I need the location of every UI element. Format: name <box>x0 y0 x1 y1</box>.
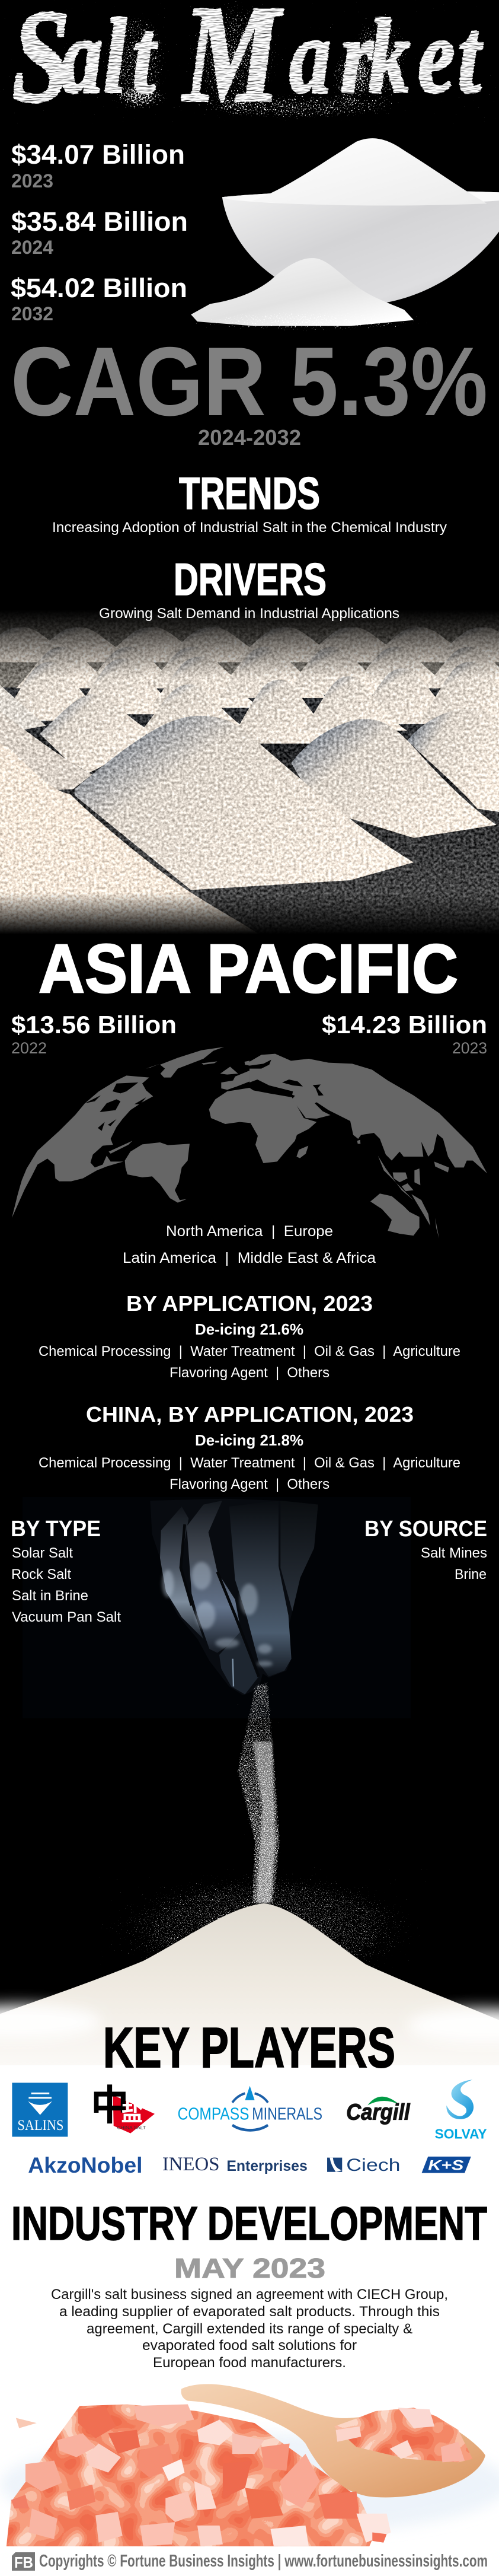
stat: Asia Pacific 2022: $13.56 Billion <box>11 1011 177 1039</box>
image: bowl of salt <box>191 138 499 326</box>
list: by type: Salt in Brine <box>12 1588 88 1604</box>
logo: Salins <box>12 2083 68 2136</box>
logo: Compass Minerals <box>178 2086 322 2130</box>
heading: Asia Pacific: ASIA PACIFIC <box>39 930 458 1007</box>
stat: 2032 <box>11 273 187 324</box>
list: by source: BY SOURCE <box>364 1517 487 1542</box>
segment list: Flavoring Agent | Others <box>169 1476 330 1492</box>
logo: Compass Minerals: COMPASS <box>178 2104 249 2123</box>
logo: K+S <box>422 2157 471 2173</box>
section: China by application <box>39 1402 460 1492</box>
title: Salt Market: t <box>132 0 158 115</box>
list: by type: Solar Salt <box>12 1545 73 1561</box>
far right foreground pile <box>407 708 499 812</box>
text: driver description: Growing Salt Demand in Industrial Applications <box>99 606 399 622</box>
title: Salt Market: r <box>341 0 374 115</box>
stat: Asia Pacific 2022 <box>11 1011 177 1057</box>
logo: Ciech <box>327 2155 401 2175</box>
highlighted crystals <box>11 2404 465 2546</box>
soft surface <box>0 2433 499 2536</box>
title: Salt Market: k <box>369 0 410 115</box>
title: Salt Market: l <box>104 0 127 115</box>
list: by type <box>11 1517 121 1625</box>
segment list: Flavoring Agent | Others <box>169 1365 330 1381</box>
far rows of salt piles <box>0 627 499 744</box>
logo: Salins: SALINS <box>18 2117 63 2134</box>
text: industry development paragraph <box>51 2287 448 2371</box>
heading: BY APPLICATION, 2023 <box>126 1291 373 1316</box>
list: other regions <box>123 1223 376 1266</box>
text: trend description: Increasing Adoption of Industrial Salt in the Chemical Industry <box>52 520 447 536</box>
photo: salt pans <box>0 610 499 946</box>
logo: China Salt: 中 <box>91 2084 129 2129</box>
right foreground pile <box>291 719 497 838</box>
spoon <box>181 2384 485 2497</box>
stat: Asia Pacific 2023: 2023 <box>452 1039 487 1057</box>
list: by type: BY TYPE <box>11 1517 101 1542</box>
logo: China Salt <box>91 2084 155 2134</box>
logo: Compass Minerals: MINERALS <box>252 2104 322 2123</box>
pile of pink salt <box>7 2404 376 2547</box>
text: industry development paragraph: agreement, Cargill extended its range of specialty & <box>87 2321 412 2337</box>
logos: key players <box>12 2080 487 2177</box>
logo: AkzoNobel: AkzoNobel <box>28 2153 143 2177</box>
glove <box>150 1499 318 1695</box>
market size stats <box>11 139 188 324</box>
ground <box>0 737 499 939</box>
small pile of salt <box>191 258 414 326</box>
segment list <box>39 1455 460 1492</box>
bowl <box>222 190 499 305</box>
text: industry development paragraph: a leading supplier of evaporated salt products. Through this <box>59 2304 440 2320</box>
salt crystals in spoon <box>334 2408 472 2462</box>
list: by source: Brine <box>455 1566 487 1582</box>
central big pile <box>75 716 414 890</box>
stat: 2023: 2023 <box>11 170 53 192</box>
CAGR period: 2024-2032 <box>198 425 301 450</box>
title: Salt Market: t <box>458 0 483 115</box>
stat: Asia Pacific 2023: $14.23 Billion <box>322 1011 487 1039</box>
stat: Asia Pacific 2023 <box>322 1011 487 1057</box>
list: other regions: North America | Europe <box>166 1223 333 1240</box>
logo: Ciech: Ciech <box>346 2155 401 2175</box>
stat: 2024: 2024 <box>11 237 53 258</box>
background: white lower section <box>0 2023 499 2576</box>
left back pile <box>40 694 149 773</box>
footer band <box>0 2546 499 2576</box>
title: Salt Market <box>0 0 499 131</box>
title: Salt Market: e <box>418 0 455 115</box>
map: world globe <box>12 1047 487 1238</box>
logo: INEOS Enterprises: INEOS <box>162 2153 220 2174</box>
photo: pink salt and wooden spoon <box>0 2384 499 2547</box>
footer <box>12 2552 488 2571</box>
list: by source: Salt Mines <box>421 1545 487 1561</box>
heading: Drivers: DRIVERS <box>174 555 327 605</box>
leading segment: De-icing 21.8% <box>195 1431 303 1449</box>
salt scatter around pile <box>181 310 436 332</box>
stat: 2023 <box>11 139 185 192</box>
heading: Trends: TRENDS <box>179 469 320 519</box>
logo: Cargill: Cargill <box>346 2099 410 2125</box>
logo: China Salt: CHINA SALT <box>117 2125 146 2131</box>
heading: Key Players: KEY PLAYERS <box>103 2016 395 2080</box>
stat: 2032: 2032 <box>11 303 53 324</box>
stat: 2024: $35.84 Billion <box>11 206 188 237</box>
title: Salt Market: a <box>289 0 331 115</box>
segment list: Chemical Processing | Water Treatment | Oil & Gas | Agriculture <box>39 1343 460 1359</box>
photo: gloved hand sprinkling salt <box>0 1497 499 2065</box>
text: industry development paragraph: evaporated food salt solutions for <box>142 2338 357 2354</box>
date: May 2023: MAY 2023 <box>174 2253 325 2284</box>
title: Salt Market: a <box>61 0 103 115</box>
logo: INEOS Enterprises <box>162 2153 308 2174</box>
leading segment: De-icing 21.6% <box>195 1320 303 1338</box>
logo: K+S: K+S <box>428 2157 464 2173</box>
falling salt stream <box>237 1682 280 1903</box>
hand backdrop <box>23 1497 411 1718</box>
segment list <box>39 1343 460 1381</box>
list: other regions: Latin America | Middle East & Africa <box>123 1250 376 1266</box>
heading: CHINA, BY APPLICATION, 2023 <box>86 1402 414 1426</box>
stat: 2032: $54.02 Billion <box>11 273 187 303</box>
salt dust behind title <box>0 0 499 125</box>
photo top fade <box>0 610 499 678</box>
salt mound <box>0 1903 499 2065</box>
logo: China Salt: 盐 <box>121 2100 143 2126</box>
text: industry development paragraph: European food manufacturers. <box>153 2355 346 2371</box>
heap of salt in bowl <box>251 138 487 206</box>
photo bottom fade <box>0 893 499 934</box>
text: industry development paragraph: Cargill's salt business signed an agreement with CIECH Group, <box>51 2287 448 2303</box>
section: by application <box>39 1291 460 1381</box>
left edge piles <box>0 685 46 734</box>
stat: Asia Pacific 2022: 2022 <box>11 1039 47 1057</box>
logo: Solvay <box>435 2080 487 2141</box>
scattered grains <box>98 1867 430 1989</box>
list: by type: Vacuum Pan Salt <box>12 1609 121 1625</box>
americas and west <box>12 1047 250 1218</box>
segment list: Chemical Processing | Water Treatment | Oil & Gas | Agriculture <box>39 1455 460 1471</box>
list: by source <box>364 1517 487 1582</box>
stat: 2023: $34.07 Billion <box>11 139 185 170</box>
list: by type: Rock Salt <box>11 1566 71 1582</box>
front left pile <box>0 744 261 939</box>
afro-eurasia and oceania <box>209 1054 487 1238</box>
logo: INEOS Enterprises: Enterprises <box>226 2158 308 2174</box>
logo: Solvay: SOLVAY <box>435 2126 487 2141</box>
stat: 2024 <box>11 206 188 258</box>
logo: Fortune Business Insights: FB <box>14 2553 33 2571</box>
